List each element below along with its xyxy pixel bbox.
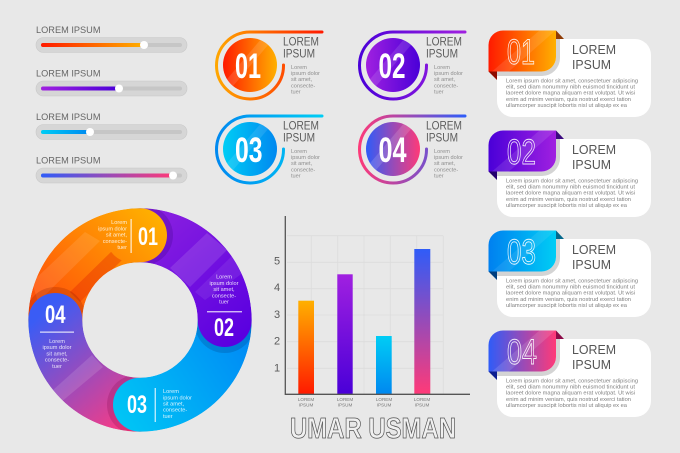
bar labels: LOREM	[376, 397, 392, 402]
card 02: elit, sed diam nonummy nibh euismod tincidunt ut	[506, 184, 635, 190]
slider 3: LOREM IPSUM	[36, 112, 101, 123]
badge 04	[360, 116, 465, 183]
badge 02: consecte-	[434, 83, 458, 89]
bar labels	[298, 397, 430, 408]
card 02: 02	[507, 133, 536, 172]
segment 02 text: Lorem	[216, 274, 232, 280]
badge 03	[217, 116, 322, 183]
card 04: elit, sed diam nonummy nibh euismod tincidunt ut	[506, 384, 635, 390]
card 04: Lorem ipsum dolor sit amet, consectetuer adipiscing	[506, 378, 638, 384]
badge 02	[360, 32, 465, 99]
card 01: 01	[507, 33, 535, 72]
segment 04 text	[40, 301, 74, 370]
segment 03 text: 03	[127, 391, 147, 419]
segment 01 text: sit amet,	[106, 233, 127, 239]
card 04: ullamcorper suscipit lobortis nisl ut aliquip ex ea	[506, 403, 628, 409]
card 01: laoreet dolore magna aliquam erat volutpat. Ut wisi	[506, 91, 635, 97]
card 03: laoreet dolore magna aliquam erat volutpat. Ut wisi	[506, 291, 635, 297]
badge 01: IPSUM	[283, 48, 315, 60]
badge 03: Lorem	[291, 149, 307, 155]
segment 02 text: sit amet,	[213, 287, 235, 293]
badge 01: ipsum dolor	[291, 71, 320, 77]
badge 02: IPSUM	[426, 48, 458, 60]
segment 04 text: 04	[45, 301, 66, 329]
bar labels: IPSUM	[377, 402, 391, 408]
card 01: enim ad minim veniam, quis nostrud exerci tation	[506, 97, 631, 103]
bar 2	[337, 274, 353, 394]
card 01: ullamcorper suscipit lobortis nisl ut aliquip ex ea	[506, 103, 628, 109]
segment 04 text: ipsum dolor	[43, 345, 72, 351]
axis numbers: 2	[274, 336, 280, 348]
card 02: enim ad minim veniam, quis nostrud exerci tation	[506, 197, 631, 203]
watermark: UMAR USMAN: UMAR USMAN	[290, 413, 456, 445]
segment 04 text: consecte-	[45, 358, 69, 364]
segment 03 text: consecte-	[163, 408, 187, 414]
axis numbers: 1	[274, 362, 280, 374]
badge 03: LOREM	[283, 120, 319, 132]
card 02: Lorem ipsum dolor sit amet, consectetuer adipiscing	[506, 178, 638, 184]
segment 01 text	[98, 219, 158, 253]
segment 02 text: consecte-	[212, 293, 236, 299]
badge 01: Lorem	[291, 65, 307, 71]
axis numbers	[274, 256, 280, 374]
badge 04: Lorem	[434, 149, 450, 155]
panel: numbered circles	[217, 32, 465, 183]
badge 03: IPSUM	[283, 132, 315, 144]
bar 4	[414, 249, 430, 394]
card 04	[488, 330, 651, 417]
card 01: IPSUM	[572, 57, 611, 72]
slider 1: LOREM IPSUM	[36, 25, 101, 36]
donut chart	[25, 205, 255, 435]
segment 02 text: 02	[214, 314, 234, 342]
badge 01: sit amet,	[291, 77, 313, 83]
segment 04 text: tuer	[52, 364, 62, 370]
segment 04 text: sit amet,	[46, 352, 68, 358]
bar labels: IPSUM	[299, 402, 313, 408]
segment 01 text: consecte-	[103, 239, 127, 245]
card 03: ullamcorper suscipit lobortis nisl ut aliquip ex ea	[506, 303, 628, 309]
axis numbers: 5	[274, 256, 280, 268]
panel: sliders	[36, 25, 187, 183]
badge 02: 02	[378, 47, 406, 86]
card 01: Lorem ipsum dolor sit amet, consectetuer adipiscing	[506, 78, 638, 84]
card 01: elit, sed diam nonummy nibh euismod tincidunt ut	[506, 84, 635, 90]
segment 01 text: ipsum dolor	[98, 226, 127, 232]
bar labels: IPSUM	[415, 402, 429, 408]
bar labels: LOREM	[298, 397, 314, 402]
bar labels: IPSUM	[338, 402, 352, 408]
card 01	[488, 30, 651, 117]
badge 02: ipsum dolor	[434, 71, 463, 77]
bar 3	[376, 336, 392, 394]
badge 01: tuer	[291, 89, 301, 95]
card 02: IPSUM	[572, 157, 611, 172]
segment 01 text: 01	[138, 223, 158, 251]
card 02: LOREM	[572, 142, 616, 157]
badge 04: 04	[378, 131, 407, 170]
segment 03 text: ipsum dolor	[163, 395, 192, 401]
segment 03 text: sit amet,	[163, 402, 185, 408]
slider 4	[36, 156, 187, 183]
axis numbers: 3	[274, 309, 280, 321]
badge 04: tuer	[434, 173, 444, 179]
segment 02 text	[207, 274, 242, 342]
bar labels: LOREM	[337, 397, 353, 402]
card 03: enim ad minim veniam, quis nostrud exerci tation	[506, 297, 631, 303]
slider 3	[36, 112, 187, 140]
axes	[285, 216, 470, 394]
panel: ribbon cards	[488, 30, 651, 417]
badge 02: Lorem	[434, 65, 450, 71]
segment 01 text: tuer	[117, 245, 127, 251]
card 04: IPSUM	[572, 357, 611, 372]
segment 04 text: Lorem	[49, 339, 65, 345]
badge 01	[217, 32, 322, 99]
card 04: enim ad minim veniam, quis nostrud exerci tation	[506, 397, 631, 403]
card 02	[488, 130, 651, 217]
bar labels: LOREM	[414, 397, 430, 402]
badge 02: sit amet,	[434, 77, 456, 83]
badge 04: sit amet,	[434, 161, 456, 167]
axis numbers: 4	[274, 282, 280, 294]
card 02: ullamcorper suscipit lobortis nisl ut aliquip ex ea	[506, 203, 628, 209]
segment 02 text: ipsum dolor	[210, 281, 239, 287]
slider 2: LOREM IPSUM	[36, 68, 101, 80]
segment 03 text: tuer	[163, 414, 173, 420]
slider 1	[36, 25, 187, 52]
badge 04: LOREM	[426, 120, 462, 132]
badge 02: tuer	[434, 89, 444, 95]
badge 02: LOREM	[426, 36, 462, 48]
badge 04: ipsum dolor	[434, 155, 463, 161]
badge 03: tuer	[291, 173, 301, 179]
slider 2	[36, 68, 187, 96]
badge 01: LOREM	[283, 36, 319, 48]
badge 03: consecte-	[291, 167, 315, 173]
segment 03 text	[127, 388, 192, 422]
segment 03 text: Lorem	[163, 389, 179, 395]
card 03	[488, 230, 651, 317]
badge 03: ipsum dolor	[291, 155, 320, 161]
card 01: LOREM	[572, 42, 616, 57]
badge 01: 01	[235, 47, 261, 86]
segment 01 text: Lorem	[111, 220, 127, 226]
card 02: laoreet dolore magna aliquam erat volutpat. Ut wisi	[506, 191, 635, 197]
card 03: Lorem ipsum dolor sit amet, consectetuer adipiscing	[506, 278, 638, 284]
badge 04: IPSUM	[426, 132, 458, 144]
badge 03: sit amet,	[291, 161, 313, 167]
segment 02 text: tuer	[219, 300, 229, 306]
card 04: 04	[507, 333, 537, 372]
bar chart	[274, 216, 470, 408]
slider 4: LOREM IPSUM	[36, 156, 101, 166]
card 03: IPSUM	[572, 257, 611, 272]
badge 01: consecte-	[291, 83, 315, 89]
card 04: LOREM	[572, 342, 616, 357]
bar 1	[298, 301, 314, 394]
badge 03: 03	[235, 131, 262, 170]
badge 04: consecte-	[434, 167, 458, 173]
card 03: elit, sed diam nonummy nibh euismod tincidunt ut	[506, 284, 635, 290]
card 03: 03	[507, 233, 536, 272]
card 03: LOREM	[572, 242, 616, 257]
card 04: laoreet dolore magna aliquam erat volutpat. Ut wisi	[506, 391, 635, 397]
